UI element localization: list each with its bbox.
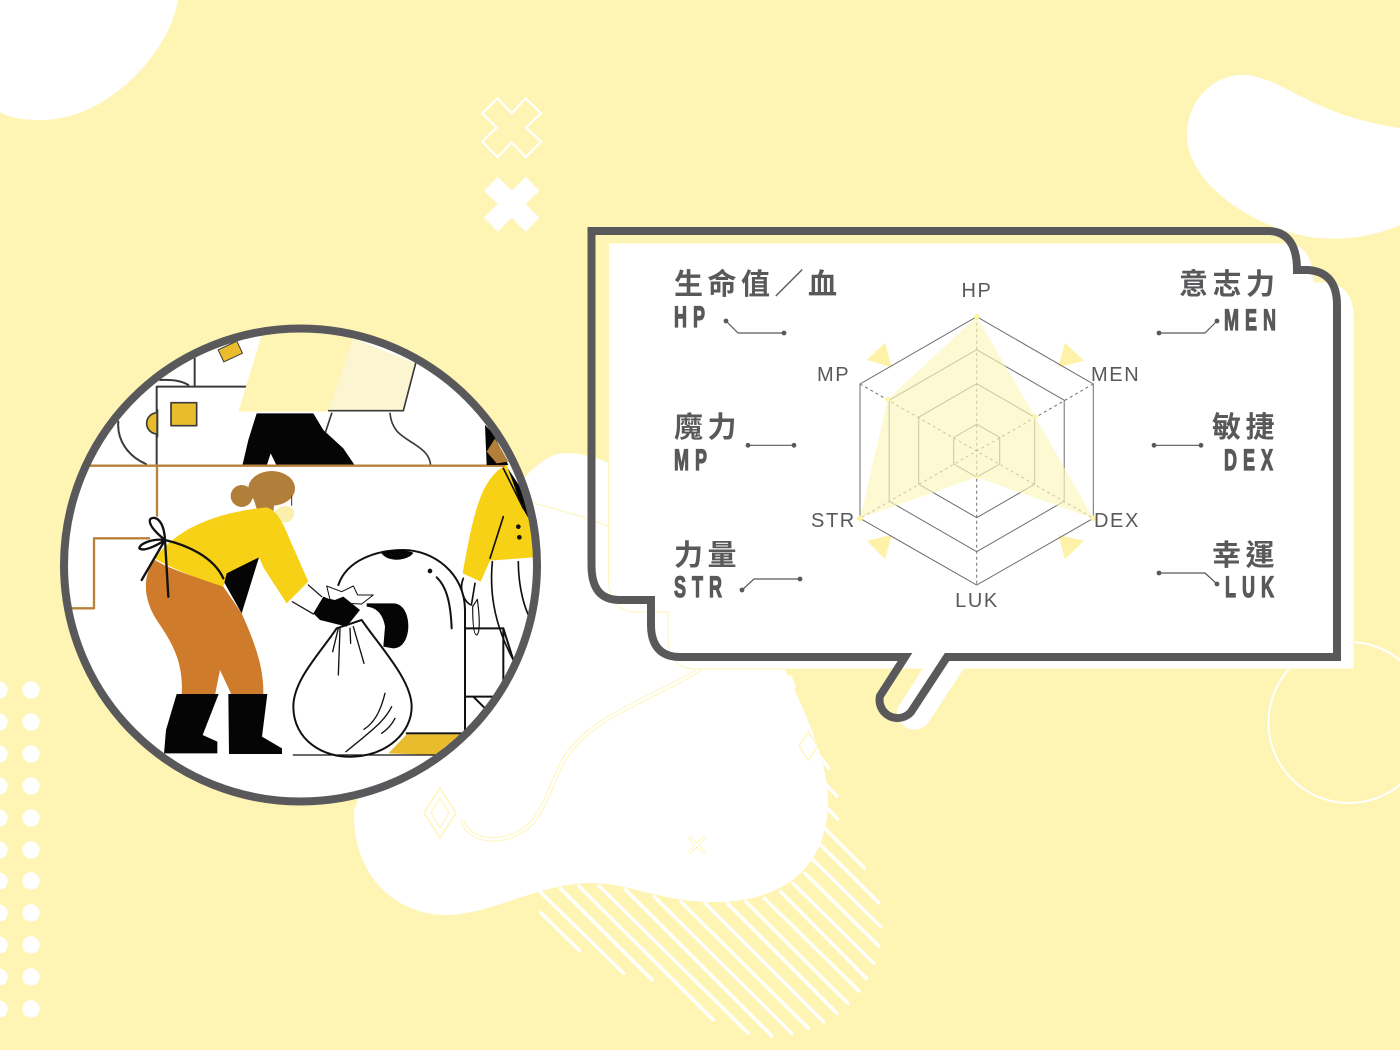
trousers [146, 560, 263, 695]
diagonal stripes decoration [540, 677, 881, 1036]
radar data points [857, 314, 1096, 521]
face line [291, 496, 292, 506]
radar axis labels [811, 280, 1140, 612]
radar axis labels: STR [811, 510, 856, 532]
label: LUK [1157, 539, 1280, 604]
woman with trash bag [139, 471, 322, 754]
label: MEN [1157, 268, 1282, 337]
speech bubble [592, 231, 1354, 730]
label: HP: 生命值／血 [674, 267, 842, 301]
second person [462, 425, 533, 708]
radar axis labels: DEX [1094, 510, 1140, 532]
label: DEX [1152, 411, 1279, 477]
background person legs [242, 413, 431, 466]
label: MP: MP [674, 445, 713, 477]
sweater [155, 507, 308, 603]
label: MP: 魔力 [674, 411, 741, 444]
label: HP [674, 267, 842, 335]
radar axis labels: MEN [1091, 364, 1140, 386]
bubble white fill [608, 243, 1354, 730]
hair [231, 471, 295, 513]
label: DEX: DEX [1224, 445, 1279, 477]
apron strings [139, 518, 223, 597]
trash bag [293, 586, 435, 757]
pale parallelogram panels [238, 330, 416, 412]
radar data area [860, 317, 1093, 518]
radar chart [811, 280, 1140, 612]
icon: outlined cross [482, 98, 541, 157]
label: MEN: 意志力 [1179, 268, 1280, 301]
label: STR [674, 539, 802, 604]
label: LUK: LUK [1225, 572, 1280, 604]
label: DEX: 敏捷 [1212, 411, 1279, 444]
background office lines [118, 358, 247, 464]
label: STR: STR [674, 572, 728, 604]
yellow wall shapes [147, 341, 242, 437]
bubble outline [592, 231, 1337, 718]
orange floor lines [70, 466, 507, 608]
label: LUK: 幸運 [1212, 539, 1279, 572]
label: HP: HP [674, 302, 711, 334]
trash can [338, 550, 465, 733]
circle outline decoration [1268, 642, 1400, 803]
illustration circle [64, 328, 538, 802]
glove [313, 597, 360, 627]
radar axis labels: MP [817, 364, 850, 386]
dot grid decoration [0, 681, 40, 1018]
radar axis labels: HP [962, 280, 992, 302]
blob: top left [0, 0, 178, 120]
blob: top right [1187, 75, 1400, 239]
icon: solid cross [484, 177, 539, 232]
label: MP [674, 411, 796, 477]
label: STR: 力量 [674, 539, 741, 572]
apron black [224, 558, 259, 614]
circle border [64, 328, 537, 802]
mask [274, 506, 294, 522]
blob line decorations [424, 503, 818, 853]
boots [164, 694, 282, 754]
blob: large centre [354, 453, 828, 915]
radar axis labels: LUK [955, 590, 999, 612]
label: MEN: MEN [1224, 305, 1282, 337]
radar grid [860, 317, 1093, 585]
radar marker triangles [867, 343, 1084, 559]
forearm [292, 585, 322, 614]
yellow mat [388, 734, 461, 755]
